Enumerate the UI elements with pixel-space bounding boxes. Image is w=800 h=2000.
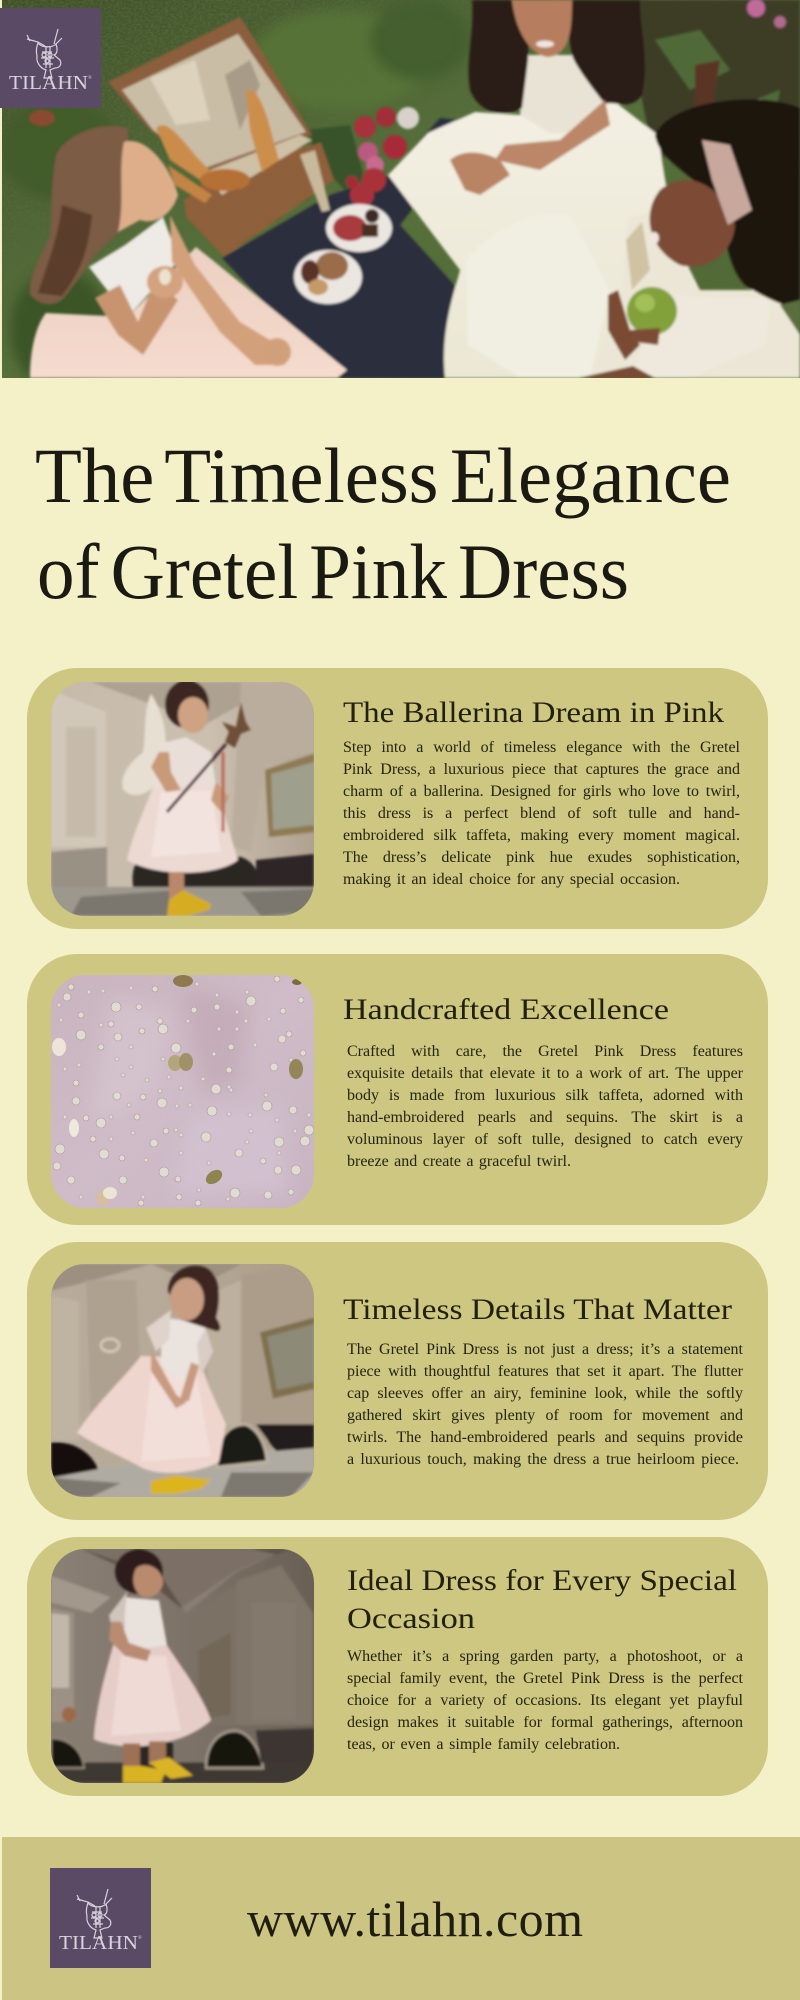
photo: girl in profile	[51, 1549, 314, 1783]
girl left bodice	[89, 217, 179, 317]
shoes	[123, 1766, 166, 1783]
text: timeless details body: The Gretel Pink Dress is not just a dress; it’s a statement	[347, 1341, 743, 1358]
chairs	[51, 1738, 84, 1768]
title: The Timeless Elegance	[35, 432, 731, 519]
girl left arms	[170, 215, 285, 365]
heading: ballerina dream: The Ballerina Dream in Pink	[343, 696, 724, 729]
hair	[115, 1549, 163, 1594]
arms hands	[151, 1350, 186, 1408]
face	[133, 1565, 163, 1597]
text: timeless details body: a luxurious touch, making the dress a true heirloom piece.	[347, 1451, 739, 1468]
floor	[51, 1446, 314, 1497]
girl left hair	[30, 126, 130, 304]
photo: girl hands clasped	[51, 1264, 314, 1497]
chair and furniture	[133, 854, 259, 890]
text: handcrafted body: exquisite details that elevate it to a work of art. The upper	[347, 1065, 743, 1082]
panel: ideal dress	[27, 1537, 768, 1796]
sleeves	[146, 1310, 171, 1352]
title	[35, 432, 731, 615]
pearls	[53, 976, 314, 1206]
girl right hair	[655, 99, 800, 310]
heading: handcrafted excellence: Handcrafted Excellence	[343, 993, 669, 1026]
text: handcrafted body	[347, 1043, 743, 1170]
mirror	[265, 754, 314, 837]
heading: ideal dress: Ideal Dress for Every Special	[347, 1564, 737, 1597]
logo: top left	[0, 8, 101, 108]
skirt	[77, 1356, 226, 1473]
icon: rabbit herald	[26, 28, 62, 79]
grass	[0, 0, 800, 378]
leaf on grass	[29, 110, 55, 126]
basket lid	[108, 17, 312, 172]
logo: footer	[50, 1868, 151, 1968]
logo wordmark: TILAHN	[9, 72, 88, 94]
girl right arm	[608, 290, 640, 360]
head	[165, 680, 209, 728]
girl right bow	[702, 140, 752, 225]
photo: girl with wand and wings	[51, 682, 314, 916]
blanket	[222, 118, 488, 378]
text: handcrafted body: breeze and create a graceful twirl.	[347, 1153, 571, 1170]
plate bottom	[294, 250, 362, 304]
wand	[167, 744, 226, 812]
skirt	[94, 1645, 211, 1746]
text: ideal dress body: design makes it suitable for formal gatherings, afternoon	[347, 1714, 743, 1731]
mirror	[260, 1317, 314, 1399]
title: of Gretel Pink Dress	[37, 528, 629, 615]
text: handcrafted body: hand-embroidered pearls and sequins. The skirt is a	[347, 1109, 743, 1126]
text: ballerina dream body: embroidered silk taffeta, making every moment magical.	[343, 827, 740, 844]
girl top arm hands	[450, 152, 510, 195]
heading: ideal dress	[347, 1564, 737, 1635]
icon: rabbit herald	[76, 1888, 112, 1939]
girl top hair	[469, 0, 645, 113]
dress skirt	[127, 782, 238, 873]
hero photo: girls at picnic	[2, 0, 800, 378]
text: ideal dress body: Whether it’s a spring garden party, a photoshoot, or a	[347, 1648, 743, 1665]
girl top face	[512, 0, 572, 57]
website url: www.tilahn.com	[247, 1891, 583, 1947]
text: ballerina dream body: charm of a ballerina. Designed for girls who love to twirl,	[343, 783, 740, 800]
text: ideal dress body: choice for a variety of occasions. Its elegant yet playful	[347, 1692, 743, 1709]
plate top	[326, 204, 392, 252]
dress bodice	[154, 737, 216, 787]
wings	[122, 694, 166, 795]
text: handcrafted body: body is made from luxurious silk taffeta, adorned with	[347, 1087, 743, 1104]
face	[170, 1278, 204, 1321]
bodice	[123, 1597, 167, 1652]
floor	[51, 1763, 314, 1783]
text: ballerina dream body: The dress’s delicate pink hue exudes sophistication,	[343, 849, 740, 866]
text: timeless details body: cap sleeves offer an airy, feminine look, while the softly	[347, 1385, 743, 1402]
panel: timeless details	[27, 1242, 768, 1520]
leaves	[305, 125, 365, 190]
text: ballerina dream body: Pink Dress, a luxurious piece that captures the grace and	[343, 761, 740, 778]
shoes	[151, 1476, 211, 1494]
logo wordmark: TILAHN	[59, 1932, 138, 1954]
girl left face	[118, 141, 178, 232]
chair right	[217, 1424, 267, 1467]
legs	[169, 872, 184, 900]
text: ideal dress body: teas, or even a simple family celebration.	[347, 1736, 620, 1753]
floor	[51, 887, 314, 916]
arms	[151, 752, 181, 792]
girl top bodice	[520, 55, 605, 133]
girl right face	[650, 180, 735, 267]
sequins	[173, 975, 193, 987]
logo wordmark: ®	[138, 1935, 142, 1941]
text: timeless details body: gathered skirt gives plenty of room for movement and	[347, 1407, 743, 1424]
photo: pearl fabric	[51, 975, 314, 1208]
panel: handcrafted excellence	[27, 954, 768, 1225]
text: ballerina dream body: Step into a world of timeless elegance with the Gretel	[343, 739, 740, 756]
text: ideal dress body: special family event, the Gretel Pink Dress is the perfect	[347, 1670, 743, 1687]
text: handcrafted body: voluminous layer of soft tulle, designed to catch every	[347, 1131, 743, 1148]
chair left	[51, 1442, 98, 1478]
text: timeless details body: piece with thoughtful features that set it apart. The flutter	[347, 1363, 743, 1380]
flowers	[354, 116, 376, 138]
wall ornament	[101, 1339, 119, 1352]
hair	[168, 1265, 220, 1331]
breads	[156, 125, 214, 180]
apple	[627, 287, 677, 335]
girl left skirt	[30, 247, 347, 378]
furniture	[256, 1424, 314, 1451]
girl right dress	[590, 210, 800, 378]
text: timeless details body	[347, 1341, 743, 1468]
girl top dress	[388, 98, 670, 378]
bodice	[161, 1317, 206, 1384]
text: ballerina dream body: making it an ideal choice for any special occasion.	[343, 871, 680, 888]
heading: ideal dress: Occasion	[347, 1602, 475, 1635]
text: ballerina dream body: this dress is a perfect blend of soft tulle and hand-	[343, 805, 740, 822]
footer band	[2, 1837, 800, 2000]
shoes	[167, 890, 211, 916]
arm	[109, 1622, 151, 1661]
dresser	[51, 847, 107, 916]
mantel	[51, 1720, 106, 1757]
grass corner	[780, 300, 800, 335]
text: ballerina dream body	[343, 739, 740, 888]
text: timeless details body: twirls. The hand-embroidered pearls and sequins provide	[347, 1429, 743, 1446]
flower bed	[630, 0, 800, 165]
heading: timeless details: Timeless Details That Matter	[343, 1293, 732, 1326]
text: handcrafted body: Crafted with care, the Gretel Pink Dress features	[347, 1043, 743, 1060]
left mirror	[51, 1608, 74, 1731]
basket body	[184, 143, 334, 257]
panel: ballerina dream	[27, 668, 768, 929]
logo wordmark: ®	[88, 75, 92, 81]
legs	[123, 1743, 140, 1770]
text: ideal dress body	[347, 1648, 743, 1753]
